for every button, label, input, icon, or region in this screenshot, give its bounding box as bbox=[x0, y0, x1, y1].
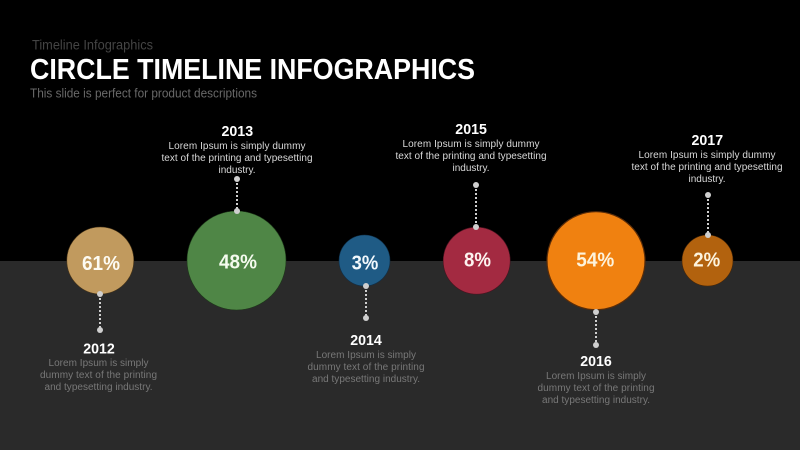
circle 2014 bbox=[339, 235, 390, 286]
description 2016: Lorem Ipsum is simply bbox=[546, 371, 646, 382]
year 2012: 2012 bbox=[83, 340, 115, 357]
header: kicker text: Timeline Infographics bbox=[32, 37, 153, 52]
description 2012: and typesetting industry. bbox=[44, 382, 152, 393]
connector 2017 bbox=[705, 192, 711, 238]
year 2014: 2014 bbox=[350, 332, 382, 349]
description 2012: dummy text of the printing bbox=[40, 370, 157, 381]
connector 2014 bbox=[363, 283, 369, 321]
description 2014: Lorem Ipsum is simply bbox=[316, 350, 416, 361]
header: subtitle: This slide is perfect for product descriptions bbox=[30, 86, 257, 100]
circle 2012 bbox=[67, 227, 134, 294]
value 48%: 48% bbox=[219, 251, 257, 274]
circle 2017 bbox=[682, 235, 733, 286]
value 61%: 61% bbox=[82, 252, 120, 275]
description 2013: industry. bbox=[218, 165, 256, 176]
description 2013: Lorem Ipsum is simply dummy bbox=[168, 141, 306, 152]
year 2017: 2017 bbox=[692, 132, 723, 149]
description 2013: text of the printing and typesetting bbox=[162, 153, 312, 164]
value 2%: 2% bbox=[693, 249, 720, 272]
item 2016 bbox=[538, 212, 654, 406]
circle 2015 bbox=[443, 227, 510, 294]
description 2016: and typesetting industry. bbox=[542, 395, 650, 406]
header: title: CIRCLE TIMELINE INFOGRAPHICS bbox=[30, 54, 475, 86]
circle 2016 bbox=[547, 212, 645, 310]
value 8%: 8% bbox=[464, 249, 491, 272]
connector 2015 bbox=[473, 182, 479, 230]
year 2015: 2015 bbox=[455, 121, 487, 138]
description 2015: industry. bbox=[452, 163, 490, 174]
connector 2013 bbox=[234, 176, 240, 214]
connector 2016 bbox=[593, 309, 599, 348]
description 2014: dummy text of the printing bbox=[308, 362, 424, 373]
item 2013 bbox=[162, 123, 312, 310]
description 2015: Lorem Ipsum is simply dummy bbox=[402, 139, 540, 150]
description 2017: Lorem Ipsum is simply dummy bbox=[638, 150, 776, 161]
circle 2013 bbox=[187, 211, 286, 310]
item 2017 bbox=[632, 132, 782, 286]
connector 2012 bbox=[97, 291, 103, 333]
item 2012 bbox=[40, 227, 157, 393]
item 2014 bbox=[308, 235, 424, 385]
description 2012: Lorem Ipsum is simply bbox=[48, 358, 148, 369]
description 2017: text of the printing and typesetting bbox=[632, 162, 782, 173]
description 2014: and typesetting industry. bbox=[312, 374, 420, 385]
description 2017: industry. bbox=[688, 174, 726, 185]
value 3%: 3% bbox=[352, 251, 378, 274]
value 54%: 54% bbox=[576, 249, 614, 272]
year 2016: 2016 bbox=[580, 353, 612, 370]
year 2013: 2013 bbox=[222, 123, 253, 140]
description 2015: text of the printing and typesetting bbox=[396, 151, 546, 162]
description 2016: dummy text of the printing bbox=[538, 383, 654, 394]
item 2015 bbox=[396, 121, 546, 294]
